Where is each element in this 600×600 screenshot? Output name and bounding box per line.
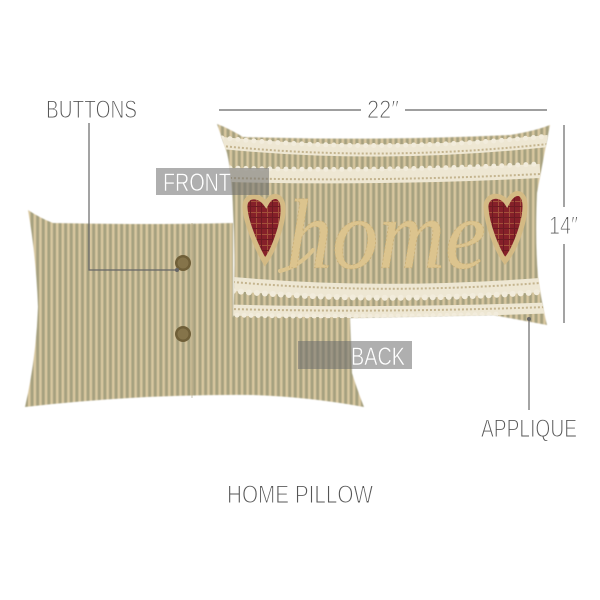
back pillow xyxy=(25,210,364,407)
title: HOME PILLOW xyxy=(227,481,373,509)
label: back: BACK xyxy=(351,343,405,371)
label: back xyxy=(298,341,412,371)
front pillow xyxy=(217,124,550,325)
button: lower xyxy=(175,326,191,342)
label: front: FRONT xyxy=(163,169,231,197)
placket seam xyxy=(191,223,193,398)
dimension: width 22 inches: 22″ xyxy=(367,96,399,124)
callout: applique xyxy=(481,317,577,443)
rope lettering: home: home xyxy=(286,179,486,290)
callout: buttons: BUTTONS xyxy=(46,96,137,124)
heart applique: left xyxy=(245,196,283,262)
callout: buttons xyxy=(46,96,179,272)
button: upper xyxy=(175,255,191,271)
dimension: height 14 inches: 14″ xyxy=(549,212,578,240)
lace trim bands xyxy=(222,136,548,316)
heart applique: right xyxy=(486,193,525,261)
